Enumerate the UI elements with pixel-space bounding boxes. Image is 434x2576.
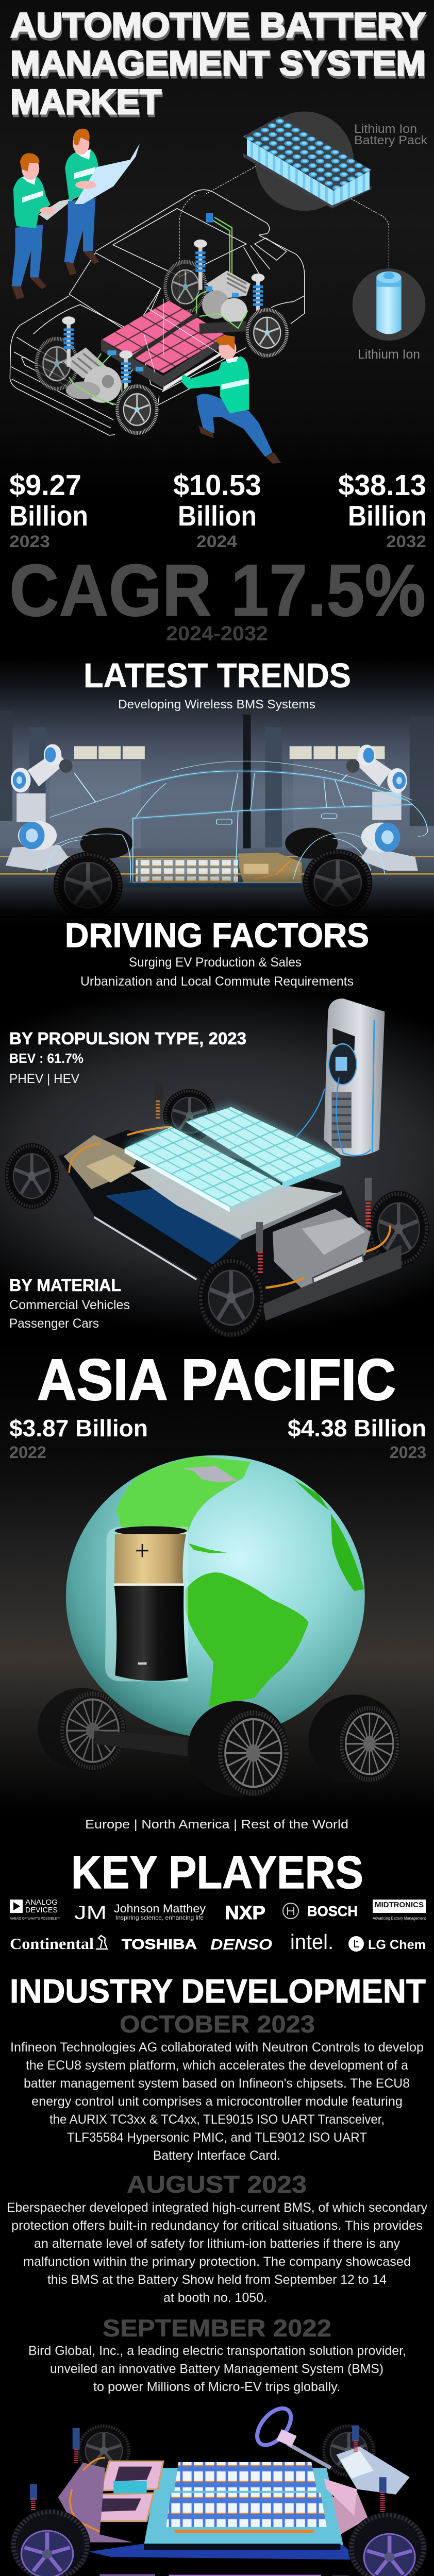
front wheels	[188, 1694, 400, 1797]
front motor assembly	[64, 347, 143, 404]
car body wireframe	[10, 190, 305, 435]
stat: asia pacific 2022: $3.87 Billion	[9, 1415, 148, 1442]
factory wall	[0, 711, 434, 917]
logo: NXP: NXP	[225, 1902, 265, 1923]
development text: Infineon	[10, 2040, 424, 2163]
icon: lithium ion battery pack	[243, 111, 372, 211]
logo: Continental: Continental	[10, 1935, 94, 1953]
logo: Midtronics: MIDTRONICS	[375, 1901, 424, 1909]
logo: Toshiba: TOSHIBA	[122, 1936, 197, 1952]
stat: asia pacific 2022: 2022	[9, 1443, 46, 1462]
connector: pack to cell	[351, 199, 389, 269]
title	[10, 6, 427, 124]
stat: 2032 market size: Billion	[348, 500, 427, 532]
development text: Infineon: the AURIX TC3xx & TC4xx, TLE9015 ISO UART Transceiver,	[49, 2112, 385, 2127]
stat: 2024 market size: 2024	[196, 532, 237, 551]
logo: Analog Devices: DEVICES	[25, 1906, 58, 1914]
by propulsion type: PHEV | HEV	[9, 1072, 79, 1086]
left robot arm	[6, 744, 95, 871]
logo: Analog Devices	[10, 1898, 60, 1921]
stat: asia pacific 2022	[9, 1415, 148, 1462]
stat: 2032 market size: 2032	[386, 532, 426, 551]
charging station	[296, 998, 385, 1156]
logo: Johnson Matthey: Inspiring science, enhancing life	[115, 1914, 204, 1921]
by material: BY MATERIAL	[9, 1276, 121, 1295]
label: lithium ion: Lithium Ion	[358, 347, 420, 362]
stat: 2032 market size: $38.13	[338, 469, 426, 502]
by material: Passenger Cars	[9, 1316, 99, 1331]
date: september 2022: SEPTEMBER 2022	[103, 2314, 331, 2342]
logo: Bosch	[283, 1903, 358, 1919]
factory scene backdrop	[0, 659, 434, 922]
stat: 2023 market size	[9, 469, 88, 551]
front right wheel	[198, 1258, 264, 1338]
cyan glowing battery modules	[125, 1107, 341, 1212]
heading: key players: KEY PLAYERS	[71, 1847, 363, 1899]
transparent car outline	[47, 761, 428, 883]
development text: Eberspaecher: at booth no. 1050.	[163, 2291, 267, 2305]
logo: LG Chem: LG Chem	[368, 1938, 426, 1952]
development text: Bird Global: unveiled an innovative Battery Management System (BMS)	[50, 2362, 383, 2376]
by material	[9, 1276, 130, 1331]
rear wheel	[38, 1688, 126, 1771]
latest trends item: Developing Wireless BMS Systems	[118, 698, 315, 711]
chassis frame	[58, 1127, 371, 1317]
platform tray	[89, 2468, 354, 2560]
stat: 2023 market size: Billion	[9, 500, 88, 532]
right robot arm	[341, 744, 418, 871]
battery	[105, 1526, 188, 1682]
development text: Bird Global: to power Millions of Micro-EV trips globally.	[93, 2380, 340, 2394]
development text: Infineon: batter management system based on Infineon's chipsets. The ECU8	[24, 2076, 410, 2091]
stat: 2024 market size: $10.53	[173, 469, 261, 502]
stat: asia pacific 2023	[288, 1415, 426, 1462]
illustration: robot arms and transparent EV	[0, 711, 434, 919]
far wheels	[80, 828, 338, 859]
worker kneeling	[181, 335, 281, 464]
worker with blueprint	[64, 129, 140, 275]
driving factors list	[80, 955, 354, 989]
logo: Johnson Matthey	[74, 1902, 206, 1923]
EV platform backdrop	[0, 984, 434, 1334]
connector: pack to car	[206, 166, 256, 194]
development text: Bird Global	[28, 2344, 406, 2394]
battery cells	[166, 2462, 327, 2533]
development text: Infineon: TLF35584 Hypersonic PMIC, and TLE9012 ISO UART	[67, 2130, 367, 2145]
by propulsion type: BY PROPULSION TYPE, 2023	[9, 1029, 246, 1048]
CAGR period: 2024-2032	[166, 622, 268, 645]
logo: Analog Devices: AHEAD OF WHAT'S POSSIBLE™	[10, 1917, 60, 1921]
driving factors list: Urbanization and Local Commute Requirements	[80, 974, 354, 989]
stat: 2023 market size: 2023	[9, 532, 50, 551]
near wheels	[54, 849, 372, 919]
label: lithium ion battery pack	[354, 122, 428, 147]
by material: Commercial Vehicles	[9, 1298, 130, 1312]
development text: Eberspaecher: protection offers built-in redundancy for critical situations. This provides	[11, 2218, 423, 2233]
steering wheel	[251, 2402, 331, 2468]
regional backdrop	[0, 1340, 434, 1855]
logo: Johnson Matthey: Johnson Matthey	[114, 1902, 206, 1915]
illustration: EV platform with charger	[5, 998, 429, 1338]
suspension springs	[62, 240, 264, 401]
by propulsion type: BEV : 61.7%	[9, 1050, 84, 1066]
stat: asia pacific 2023: $4.38 Billion	[288, 1415, 426, 1442]
date: october 2023: OCTOBER 2023	[120, 2010, 315, 2038]
development text: Eberspaecher: Eberspaecher developed integrated high-current BMS, of which secondary	[7, 2200, 427, 2215]
rear motor assembly	[196, 213, 251, 334]
development text: Eberspaecher: this BMS at the Battery Show held from September 12 to 14	[47, 2273, 387, 2287]
heading: latest trends: LATEST TRENDS	[84, 656, 351, 695]
development text: Infineon: energy control unit comprises a microcontroller module featuring	[31, 2094, 403, 2109]
illustration: globe car with battery	[38, 1455, 400, 1797]
stat: 2024 market size	[173, 469, 261, 551]
chassis: battery cells	[125, 858, 302, 892]
near wheels	[115, 308, 289, 435]
illustration: EV skateboard platform	[10, 2402, 427, 2576]
icon: Continental horse	[96, 1936, 108, 1949]
battery tray with pink cells	[101, 299, 227, 391]
stat: 2032 market size	[338, 469, 427, 551]
chassis: inverter	[238, 853, 302, 883]
chassis axle	[94, 1731, 194, 1757]
title: MARKET	[10, 82, 161, 122]
front motor unit	[39, 1081, 402, 1320]
date: august 2023: AUGUST 2023	[127, 2171, 307, 2198]
development text: Eberspaecher: malfunction within the primary protection. The company showcased	[23, 2255, 411, 2269]
far wheels	[77, 2424, 376, 2477]
title: MANAGEMENT SYSTEM	[10, 44, 426, 83]
logo: Johnson Matthey: JM	[74, 1902, 107, 1923]
logo: Midtronics: Advancing Battery Management	[373, 1916, 426, 1921]
title: AUTOMOTIVE BATTERY	[11, 8, 427, 47]
top section backdrop	[0, 0, 434, 495]
development text: Bird Global: Bird Global, Inc., a leading electric transportation solution provider,	[28, 2344, 406, 2358]
stat: 2023 market size: $9.27	[9, 469, 81, 502]
shock absorbers	[30, 2426, 387, 2512]
title: MANAGEMENT SYSTEM	[11, 46, 427, 86]
heading: asia pacific: ASIA PACIFIC	[37, 1347, 396, 1412]
development text: Infineon: Battery Interface Card.	[153, 2148, 280, 2163]
far wheels	[35, 260, 208, 391]
front left wheel	[5, 1143, 59, 1209]
power electronics	[58, 2458, 163, 2543]
near wheels	[10, 2509, 427, 2576]
label: lithium ion battery pack: Lithium Ion	[354, 122, 417, 136]
logo: Denso: DENSO	[210, 1937, 273, 1953]
title: MARKET	[11, 85, 162, 124]
drive unit	[324, 2447, 410, 2534]
title: AUTOMOTIVE BATTERY	[10, 6, 426, 45]
label: lithium ion battery pack: Battery Pack	[354, 133, 428, 147]
development text: Infineon: Infineon Technologies AG collaborated with Neutron Controls to develop	[10, 2040, 424, 2055]
logo: Analog Devices: ANALOG	[25, 1898, 58, 1907]
development text: Eberspaecher	[7, 2200, 427, 2305]
rear wheels	[163, 1089, 429, 1266]
other regions: Europe | North America | Rest of the World	[85, 1818, 348, 1832]
continents	[116, 1456, 364, 1707]
dashed door pillar	[179, 195, 195, 337]
floor reflections	[99, 2574, 349, 2576]
logo: Midtronics	[373, 1900, 426, 1921]
logo: LG Chem	[348, 1936, 426, 1952]
worker with tablet	[12, 153, 75, 299]
development text: Eberspaecher: an alternate level of safety for lithium-ion batteries if there is any	[34, 2236, 400, 2251]
stat: asia pacific 2023: 2023	[390, 1443, 426, 1462]
logo: Bosch: BOSCH	[307, 1903, 358, 1919]
by propulsion type	[9, 1029, 246, 1086]
driving factors list: Surging EV Production & Sales	[129, 955, 302, 970]
icon: lithium ion cell	[353, 268, 425, 341]
development text: Infineon: the ECU8 system platform, which accelerates the development of a	[26, 2058, 408, 2073]
stat: 2024 market size: Billion	[178, 500, 257, 532]
illustration: EV with workers	[10, 111, 425, 464]
heading: industry development: INDUSTRY DEVELOPMENT	[10, 1972, 426, 2010]
logo: Intel: intel.	[290, 1930, 333, 1954]
globe	[66, 1455, 365, 1738]
heading: driving factors: DRIVING FACTORS	[65, 916, 369, 954]
bottom fade of factory scene	[0, 871, 434, 918]
